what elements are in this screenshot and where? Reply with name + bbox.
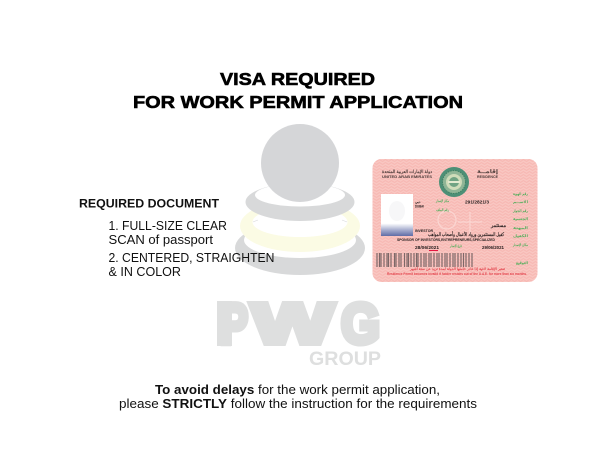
footer note: please STRICTLY follow the instruction for the requirements [119,397,477,411]
card header: إقامــة [477,169,499,175]
card details: مستثمر [490,223,506,229]
watermark: upper ring [246,183,354,221]
green field labels: رقم الهوية [513,191,528,197]
green field labels: الكفيل [513,233,528,239]
green field labels: مكان الإصدار [512,242,528,248]
watermark: yellow ring [240,200,360,252]
card details: دبي [415,200,421,205]
watermark: PWG wordmark: P [220,292,248,356]
card details: INVESTOR [415,229,433,233]
card details: DUBAI [415,204,424,208]
card details: 28/06/2021 [415,245,440,250]
watermark: PWG wordmark: W [252,292,333,356]
green field labels: مكان الإصدار [435,198,449,204]
watermark: lower ring [235,221,365,275]
watermark: PWG Group logo [217,124,381,370]
barcode [377,253,472,267]
title: VISA REQUIRED [220,69,375,89]
green field labels: المهنة [513,225,528,231]
small red underline [429,250,438,251]
card details: SPONSOR OF INVESTORS,ENTREPRENEURS,SPECIALIZED [397,237,495,242]
green field labels [435,191,528,266]
card red notice: Residence Permit becomes invalid if holder resides out of the U.A.E. for more than six months. [387,272,527,276]
green field labels: رقم الجواز [512,208,528,214]
faint card emblem [438,211,482,234]
title: FOR WORK PERMIT APPLICATION [133,92,463,112]
green field labels: الجنسية [513,216,528,222]
requirement 2: 2. CENTERED, STRAIGHTEN [108,251,274,265]
requirement 2: & IN COLOR [108,265,181,279]
card details [397,200,506,250]
green field labels: التوقيع [516,260,528,266]
heading: required document: REQUIRED DOCUMENT [79,196,220,210]
watermark: GROUP wordmark: GROUP [309,348,381,370]
card header: دولة الإمارات العربية المتحدة [382,169,433,175]
requirement 1 [108,219,227,247]
requirement 2 [108,251,274,279]
card red notice: تعتبر الإقامة لاغية إذا غادر حاملها الدولة لمدة تزيد عن ستة أشهر [409,265,506,272]
passport photo [381,194,413,236]
card red notice [387,265,527,276]
requirement 1: 1. FULL-SIZE CLEAR [108,219,227,233]
footer note [119,383,477,411]
card background [372,159,538,282]
green field labels: تاريخ الإصدار [449,243,463,249]
watermark: PWG wordmark [217,292,380,356]
card details: 291/2821/3 [465,200,489,204]
watermark: PWG wordmark: G [341,292,380,356]
watermark: sphere [261,124,339,202]
card details: كفيل المستثمرين ورواد الأعمال وأصحاب المواهب [428,230,504,238]
green field labels: رقم الملف [436,207,449,213]
footer note: To avoid delays for the work permit application, [155,383,440,397]
residence visa card [372,159,538,282]
green field labels: الاســم [513,199,528,205]
card header [382,169,499,179]
title [133,69,463,112]
card header: UNITED ARAB EMIRATES [382,174,432,179]
text block: required document [79,196,274,279]
card details: 29/06/2021 [482,245,505,250]
icon: card seal [439,167,469,197]
card header: RESIDENCE [477,175,499,179]
requirement 1: SCAN of passport [108,233,214,247]
